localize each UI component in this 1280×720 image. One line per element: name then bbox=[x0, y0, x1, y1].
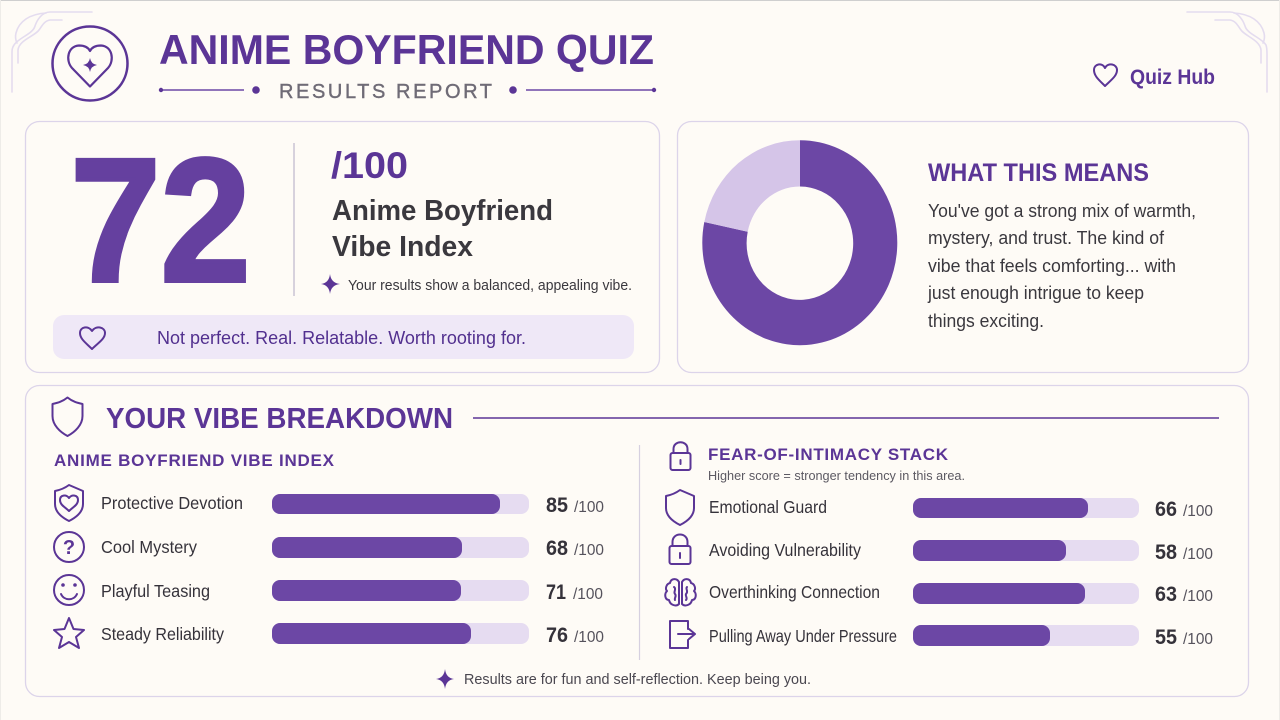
row: playful teasing: Playful Teasing bbox=[101, 581, 210, 601]
panel: vibe breakdown bbox=[26, 386, 1248, 696]
row: overthinking connection: 63 bbox=[1155, 583, 1177, 606]
row: cool mystery: ? bbox=[63, 537, 75, 559]
row: emotional guard: /100 bbox=[1183, 503, 1213, 520]
score number: 72 bbox=[70, 122, 251, 318]
callout pill: Not perfect. Real. Relatable. Worth rooting for. bbox=[157, 327, 526, 348]
row: avoiding vulnerability: 58 bbox=[1155, 541, 1177, 564]
row: cool mystery bbox=[54, 532, 604, 562]
icon: lock bbox=[670, 442, 690, 470]
explanation text bbox=[927, 201, 1196, 331]
section heading: YOUR VIBE BREAKDOWN bbox=[106, 403, 453, 435]
subtitle with rules: RESULTS REPORT bbox=[279, 81, 492, 103]
heading: WHAT THIS MEANS bbox=[928, 159, 1149, 187]
score label: Anime Boyfriend bbox=[332, 195, 553, 227]
row: emotional guard: 66 bbox=[1155, 498, 1177, 521]
right column: fear-of-intimacy stack bbox=[665, 442, 1213, 649]
row: overthinking connection: /100 bbox=[1183, 588, 1213, 605]
corner ornament: top left bbox=[12, 12, 92, 92]
explanation text: things exciting. bbox=[928, 311, 1044, 331]
icon: shield bbox=[52, 398, 82, 436]
note: Higher score = stronger tendency in this area. bbox=[708, 468, 965, 483]
corner ornament: top right bbox=[1187, 12, 1267, 92]
score note: Your results show a balanced, appealing vibe. bbox=[348, 278, 632, 294]
row: protective devotion: Protective Devotion bbox=[101, 493, 243, 513]
subheading: ANIME BOYFRIEND VIBE INDEX bbox=[54, 451, 335, 470]
row: avoiding vulnerability: Avoiding Vulnerability bbox=[709, 540, 861, 560]
row: protective devotion: 85 bbox=[546, 494, 568, 517]
donut chart bbox=[702, 140, 897, 345]
row: pulling away under pressure: /100 bbox=[1183, 631, 1213, 648]
title: ANIME BOYFRIEND QUIZ bbox=[159, 26, 654, 73]
panel: score bbox=[26, 122, 660, 372]
row: playful teasing: 71 bbox=[546, 581, 566, 604]
footer note: Results are for fun and self-reflection. Keep being you. bbox=[464, 672, 811, 688]
score suffix: /100 bbox=[331, 145, 408, 186]
subheading: FEAR-OF-INTIMACY STACK bbox=[708, 445, 949, 464]
row: overthinking connection bbox=[665, 579, 1213, 606]
row: cool mystery: /100 bbox=[574, 542, 604, 559]
explanation text: mystery, and trust. The kind of bbox=[928, 228, 1165, 248]
panel: what this means bbox=[678, 122, 1248, 372]
row: cool mystery: Cool Mystery bbox=[101, 537, 197, 557]
row: steady reliability: Steady Reliability bbox=[101, 624, 224, 644]
subtitle with rules bbox=[159, 81, 656, 103]
row: pulling away under pressure: 55 bbox=[1155, 626, 1177, 649]
row: emotional guard: Emotional Guard bbox=[709, 497, 827, 517]
row: steady reliability: 76 bbox=[546, 624, 568, 647]
row: pulling away under pressure bbox=[670, 621, 1213, 649]
row: pulling away under pressure: Pulling Away Under Pressure bbox=[709, 626, 897, 646]
row: protective devotion: /100 bbox=[574, 499, 604, 516]
explanation text: You've got a strong mix of warmth, bbox=[928, 201, 1196, 221]
row: cool mystery: 68 bbox=[546, 537, 568, 560]
row: avoiding vulnerability: /100 bbox=[1183, 546, 1213, 563]
row: avoiding vulnerability bbox=[670, 534, 1213, 564]
callout pill bbox=[53, 315, 634, 359]
score label bbox=[332, 195, 553, 263]
logo: heart badge bbox=[52, 26, 128, 100]
row: protective devotion bbox=[55, 485, 604, 521]
left column: vibe index bbox=[54, 451, 604, 648]
row: steady reliability bbox=[54, 618, 604, 648]
quiz hub link bbox=[1094, 64, 1215, 89]
row: overthinking connection: Overthinking Connection bbox=[709, 582, 880, 602]
quiz hub link: Quiz Hub bbox=[1130, 66, 1215, 89]
icon: sparkle bbox=[321, 274, 340, 294]
score label: Vibe Index bbox=[332, 231, 473, 263]
row: playful teasing: /100 bbox=[573, 586, 603, 603]
row: steady reliability: /100 bbox=[574, 629, 604, 646]
row: emotional guard bbox=[666, 490, 1213, 525]
explanation text: vibe that feels comforting... with bbox=[928, 256, 1176, 276]
row: playful teasing bbox=[54, 575, 603, 605]
explanation text: just enough intrigue to keep bbox=[927, 283, 1144, 303]
